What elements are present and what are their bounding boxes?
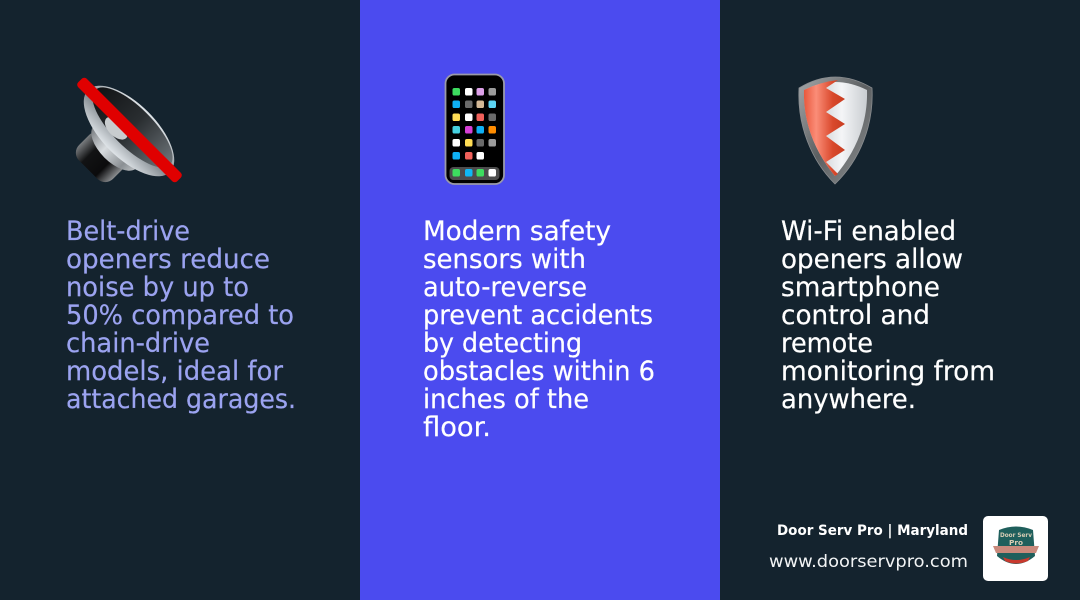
text: wi-fi control: remote [781,328,873,359]
text: belt-drive noise: noise by up to [66,272,249,303]
text: safety sensors: inches of the [423,384,589,415]
text: belt-drive noise [66,216,296,415]
text: wi-fi control [781,216,995,415]
text: wi-fi control: Wi-Fi enabled [781,216,956,247]
panel: quiet operation [0,0,360,600]
text: safety sensors: auto-reverse [423,272,587,303]
icon: smartphone [446,74,504,184]
text: wi-fi control: smartphone [781,272,940,303]
text: wi-fi control: openers allow [781,244,963,275]
text: belt-drive noise: 50% compared to [66,300,294,331]
text: safety sensors [423,216,655,443]
footer brand name: Door Serv Pro | Maryland [777,523,968,539]
text: belt-drive noise: chain-drive [66,328,210,359]
logo badge: Door Serv [1000,532,1032,539]
logo badge [983,516,1048,581]
text: safety sensors: prevent accidents [423,300,653,331]
text: belt-drive noise: openers reduce [66,244,270,275]
logo badge: Pro [1009,539,1023,547]
text: belt-drive noise: models, ideal for [66,356,283,387]
icon: shield [799,77,872,184]
text: belt-drive noise: attached garages. [66,384,296,415]
panel: safety sensors [360,0,720,600]
text: wi-fi control: monitoring from [781,356,995,387]
text: wi-fi control: control and [781,300,930,331]
text: belt-drive noise: Belt-drive [66,216,190,247]
icon: muted speaker [69,71,189,191]
panel: smart control [720,0,1080,600]
text: safety sensors: by detecting [423,328,582,359]
text: safety sensors: floor. [423,412,491,443]
text: safety sensors: Modern safety [423,216,611,247]
text: wi-fi control: anywhere. [781,384,916,415]
footer website: www.doorservpro.com [769,552,968,572]
text: safety sensors: sensors with [423,244,586,275]
text: safety sensors: obstacles within 6 [423,356,655,387]
